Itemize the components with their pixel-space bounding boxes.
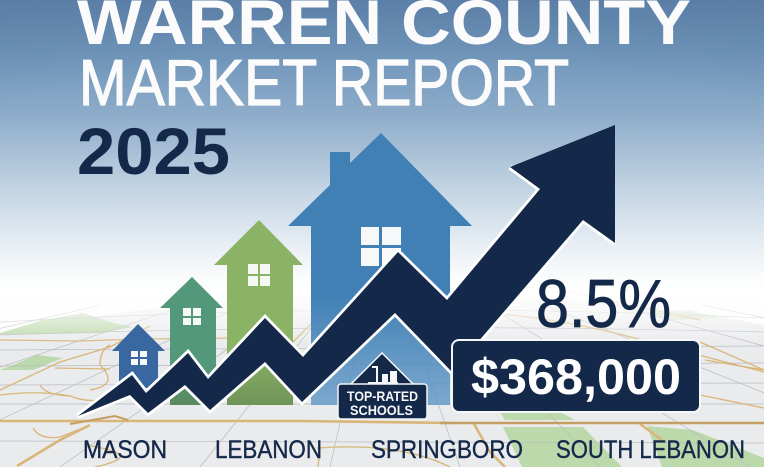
growth percentage: 8.5% [536, 266, 671, 342]
price callout: $368,000 [471, 349, 681, 405]
subtitle: Market Report: MARKET REPORT [79, 46, 569, 119]
green house window [248, 264, 270, 286]
badge: top-rated schools: SCHOOLS [350, 402, 413, 418]
city label: South Lebanon: SOUTH LEBANON [556, 436, 745, 464]
house: small blue [112, 324, 165, 388]
small house window [131, 351, 147, 365]
rising arrow [78, 125, 615, 416]
teal house window [183, 308, 201, 325]
house window [361, 227, 401, 266]
price callout [452, 340, 700, 412]
street map ground [0, 288, 764, 467]
map green areas [0, 310, 764, 467]
city label: Springboro: SPRINGBORO [371, 436, 523, 464]
year: 2025 [77, 114, 230, 188]
city label: Lebanon: LEBANON [215, 436, 322, 464]
badge: top-rated schools: TOP-RATED [347, 388, 418, 404]
house: teal [160, 277, 223, 405]
horizon fade [0, 288, 764, 345]
city label: Mason: MASON [83, 436, 167, 464]
badge: top-rated schools [338, 353, 427, 419]
house: large blue [288, 133, 472, 405]
badge icon: buildings [368, 366, 398, 384]
house: green [214, 220, 303, 405]
